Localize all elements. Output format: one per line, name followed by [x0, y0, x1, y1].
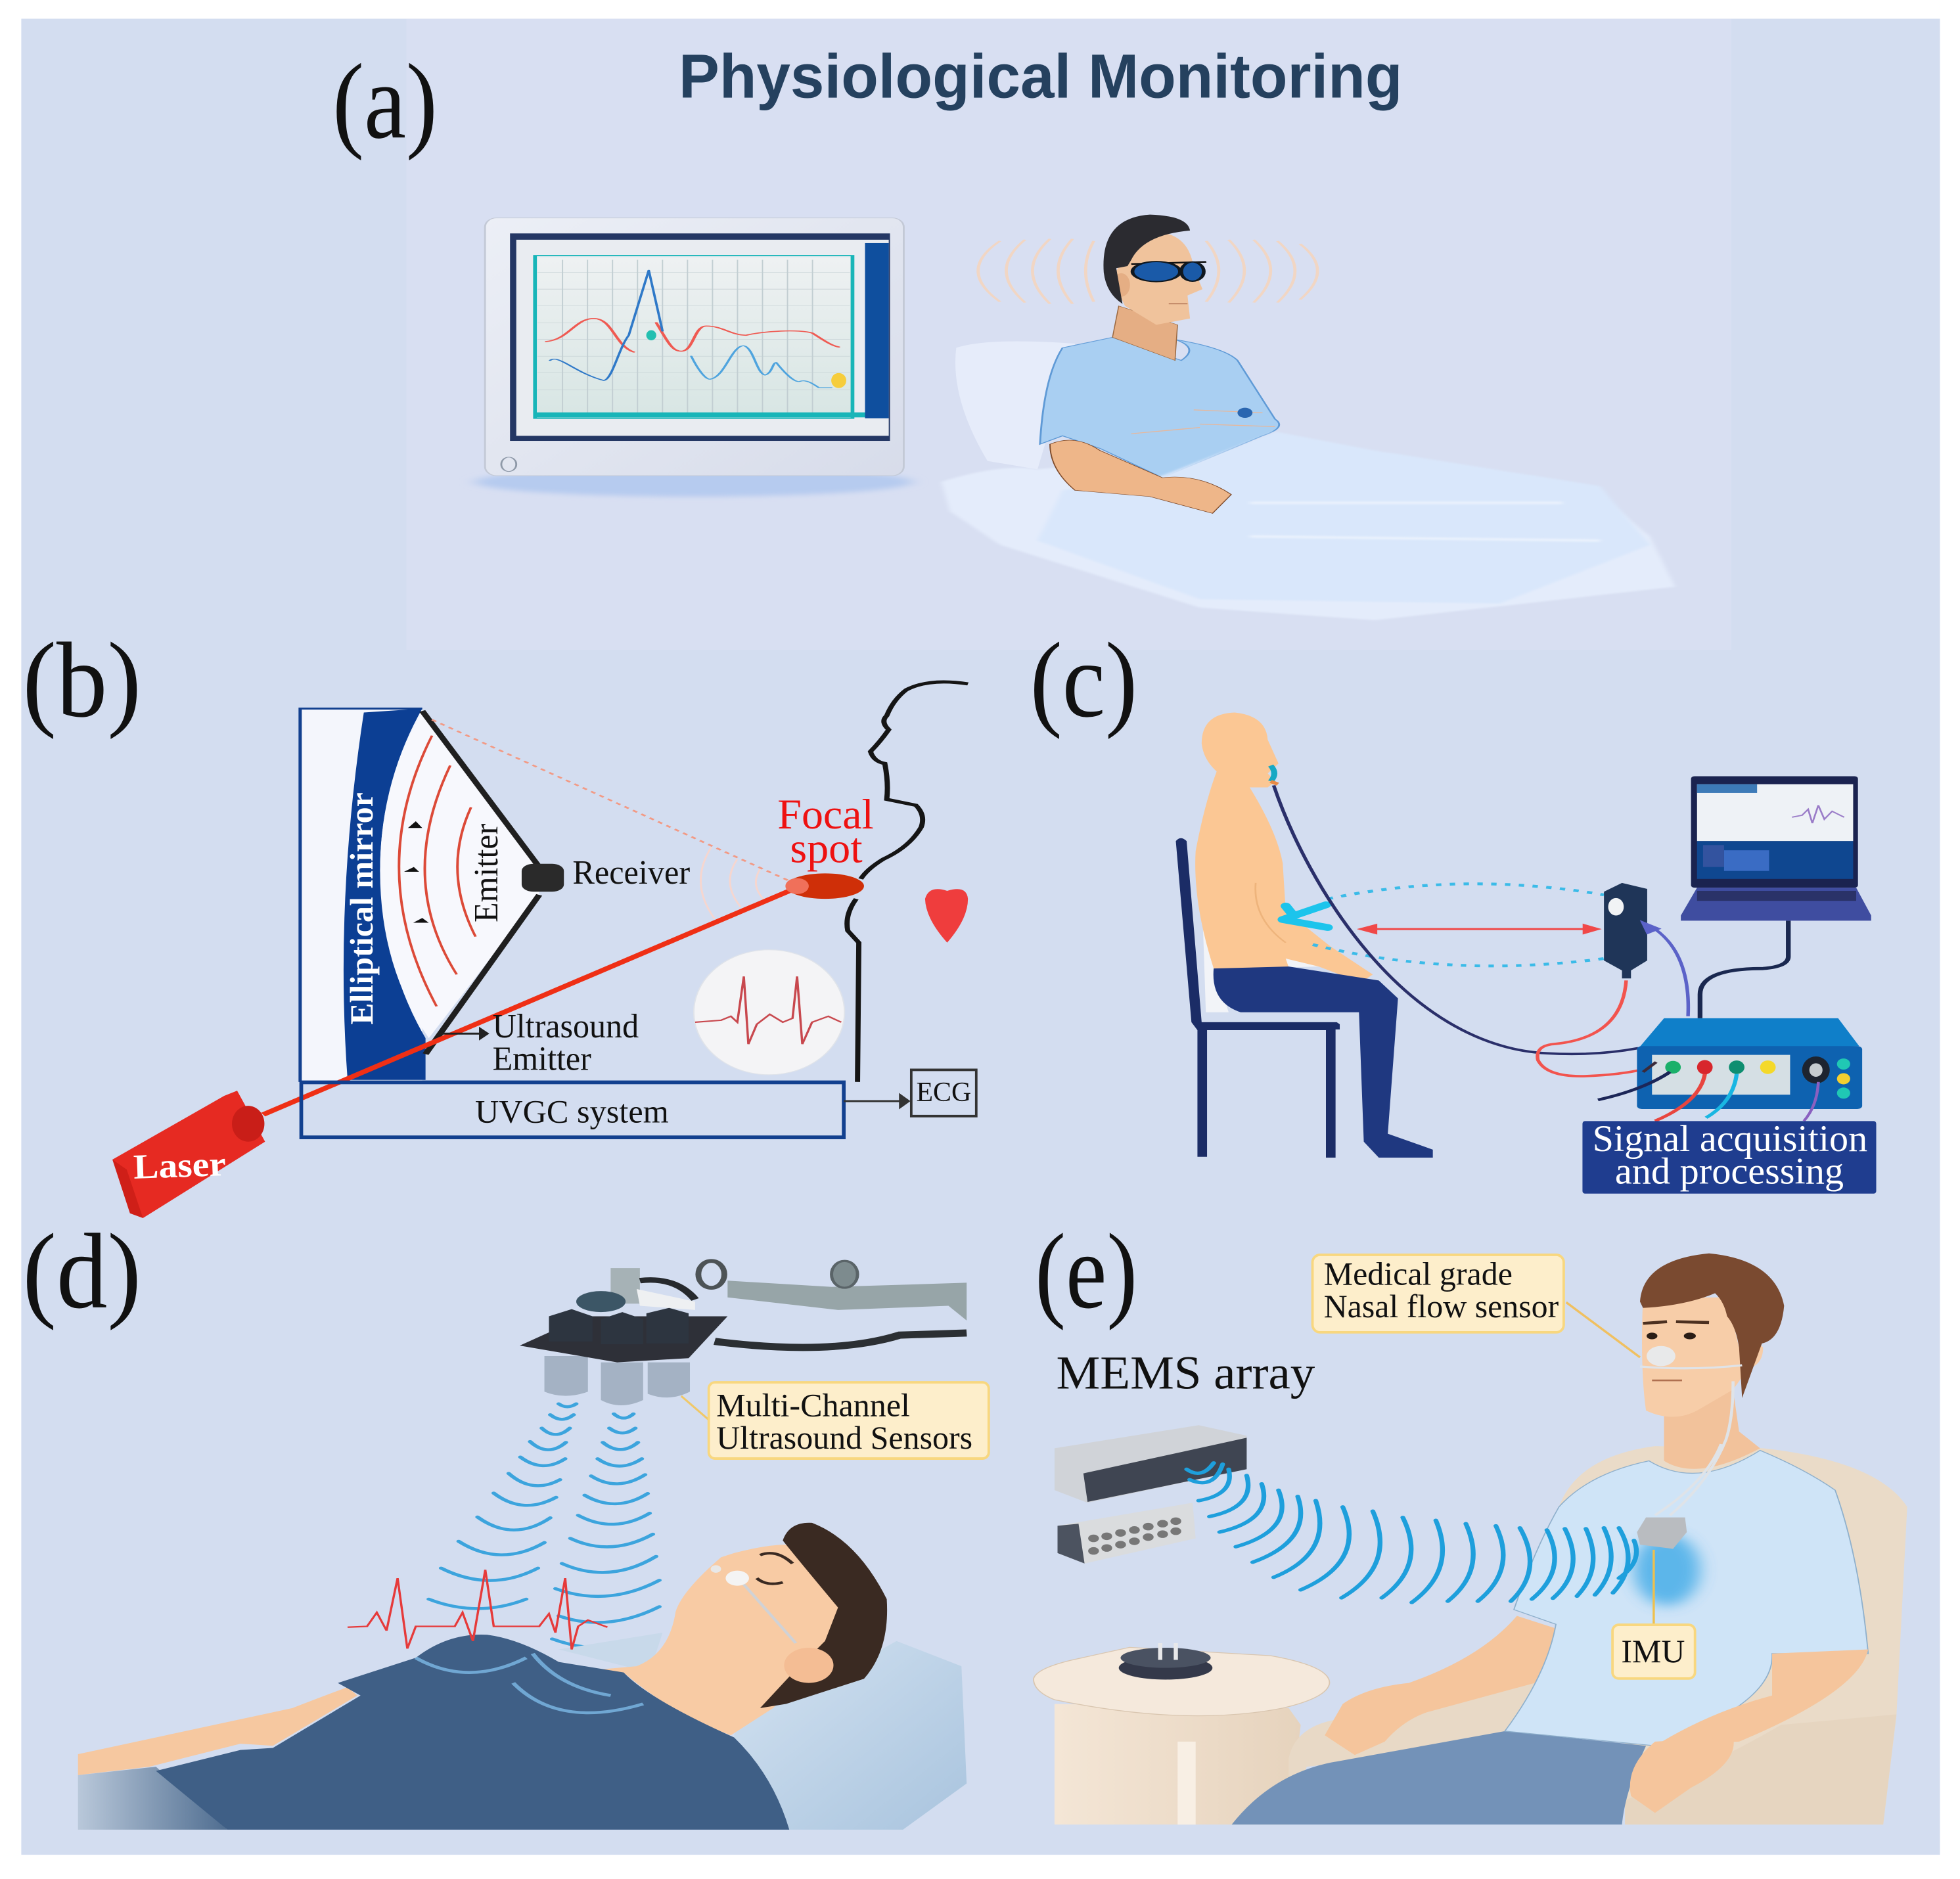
- panel: (b) UVGC system: [22, 621, 976, 1218]
- ECG inset circle: [694, 950, 844, 1075]
- callout: medical grade nasal flow sensor: Medical grade: [1324, 1256, 1513, 1292]
- laptop: [1681, 776, 1871, 920]
- ECG trace over chest: [348, 1570, 607, 1650]
- label: MEMS array: MEMS array: [1057, 1347, 1315, 1399]
- panel: (a) physiological monitoring: [332, 19, 1731, 650]
- side table: [1034, 1643, 1329, 1824]
- panel: (c) signal acquisition setup: [1030, 621, 1876, 1194]
- label: ultrasound emitter: [493, 1008, 639, 1077]
- icon: heart: [925, 889, 968, 943]
- laser beam and focal spot: [263, 719, 864, 1115]
- signal arcs around head: [978, 239, 1317, 304]
- cyan chest sensors: [1283, 905, 1328, 928]
- ultrasound wave arcs: [429, 1404, 660, 1648]
- UVGC system box: UVGC system: [475, 1093, 669, 1129]
- label: focal spot: spot: [790, 825, 863, 872]
- panel label c: (c): [1030, 621, 1137, 740]
- ultrasound probe: [1604, 883, 1647, 978]
- chart: waveforms: [546, 270, 846, 388]
- title: Physiological Monitoring: [679, 41, 1402, 111]
- panel label d: (d): [22, 1212, 141, 1331]
- label: focal spot: Focal: [777, 790, 874, 838]
- callout: multi-channel ultrasound sensors: [681, 1382, 989, 1459]
- wireless waves: [1187, 1463, 1637, 1602]
- panel: (d) multi-channel ultrasound: [22, 1212, 989, 1830]
- ultrasound sensor rig: [520, 1261, 967, 1405]
- label: signal acquisition and processing: [1582, 1118, 1876, 1194]
- dotted sensing field: [1313, 884, 1604, 966]
- signal acquisition unit: [1598, 1018, 1862, 1121]
- label: receiver: Receiver: [572, 854, 690, 892]
- callout: multi-channel ultrasound sensors: Multi-Channel: [716, 1387, 910, 1423]
- patient in bed: [942, 215, 1675, 620]
- ECG box: [911, 1070, 976, 1116]
- panel label b: (b): [22, 621, 141, 740]
- label: ultrasound emitter: Emitter: [493, 1040, 591, 1077]
- callout: multi-channel ultrasound sensors: Ultrasound Sensors: [716, 1420, 972, 1456]
- panel label e: (e): [1035, 1212, 1137, 1331]
- cables: [1538, 920, 1789, 1076]
- label: ultrasound emitter: Ultrasound: [493, 1008, 639, 1045]
- callout: IMU: IMU: [1621, 1633, 1685, 1669]
- elliptical mirror assembly: [300, 708, 564, 1082]
- sleeping patient: [78, 1523, 967, 1830]
- panel: (e) MEMS array and wearables: [1034, 1212, 1907, 1824]
- human profile outline: [847, 682, 968, 1082]
- breathing tube: [1273, 785, 1638, 1054]
- UVGC system box: [302, 1082, 844, 1137]
- monitor: [475, 218, 913, 497]
- label: elliptical mirror: Elliptical mirror: [344, 792, 380, 1025]
- label: focal spot: [777, 790, 874, 872]
- laser device: Laser: [133, 1144, 227, 1187]
- label: signal acquisition and processing: and processing: [1615, 1151, 1844, 1192]
- callout: medical grade nasal flow sensor: [1313, 1255, 1640, 1357]
- red distance arrow: [1361, 925, 1598, 933]
- seated person in armchair: [1232, 1254, 1907, 1824]
- label: signal acquisition and processing: Signal acquisition: [1593, 1118, 1867, 1160]
- arrow: ultrasound emitter: [440, 1029, 488, 1039]
- ECG box: ECG: [916, 1077, 971, 1108]
- callout: medical grade nasal flow sensor: Nasal flow sensor: [1324, 1288, 1559, 1324]
- callout: IMU: [1612, 1550, 1695, 1679]
- laser device: [112, 1091, 265, 1218]
- panel label a: (a): [332, 42, 438, 161]
- label: emitter: Emitter: [468, 824, 505, 922]
- seated subject on chair: [1176, 713, 1433, 1158]
- MEMS array devices: [1055, 1425, 1246, 1564]
- arrow: to ECG: [844, 1095, 909, 1107]
